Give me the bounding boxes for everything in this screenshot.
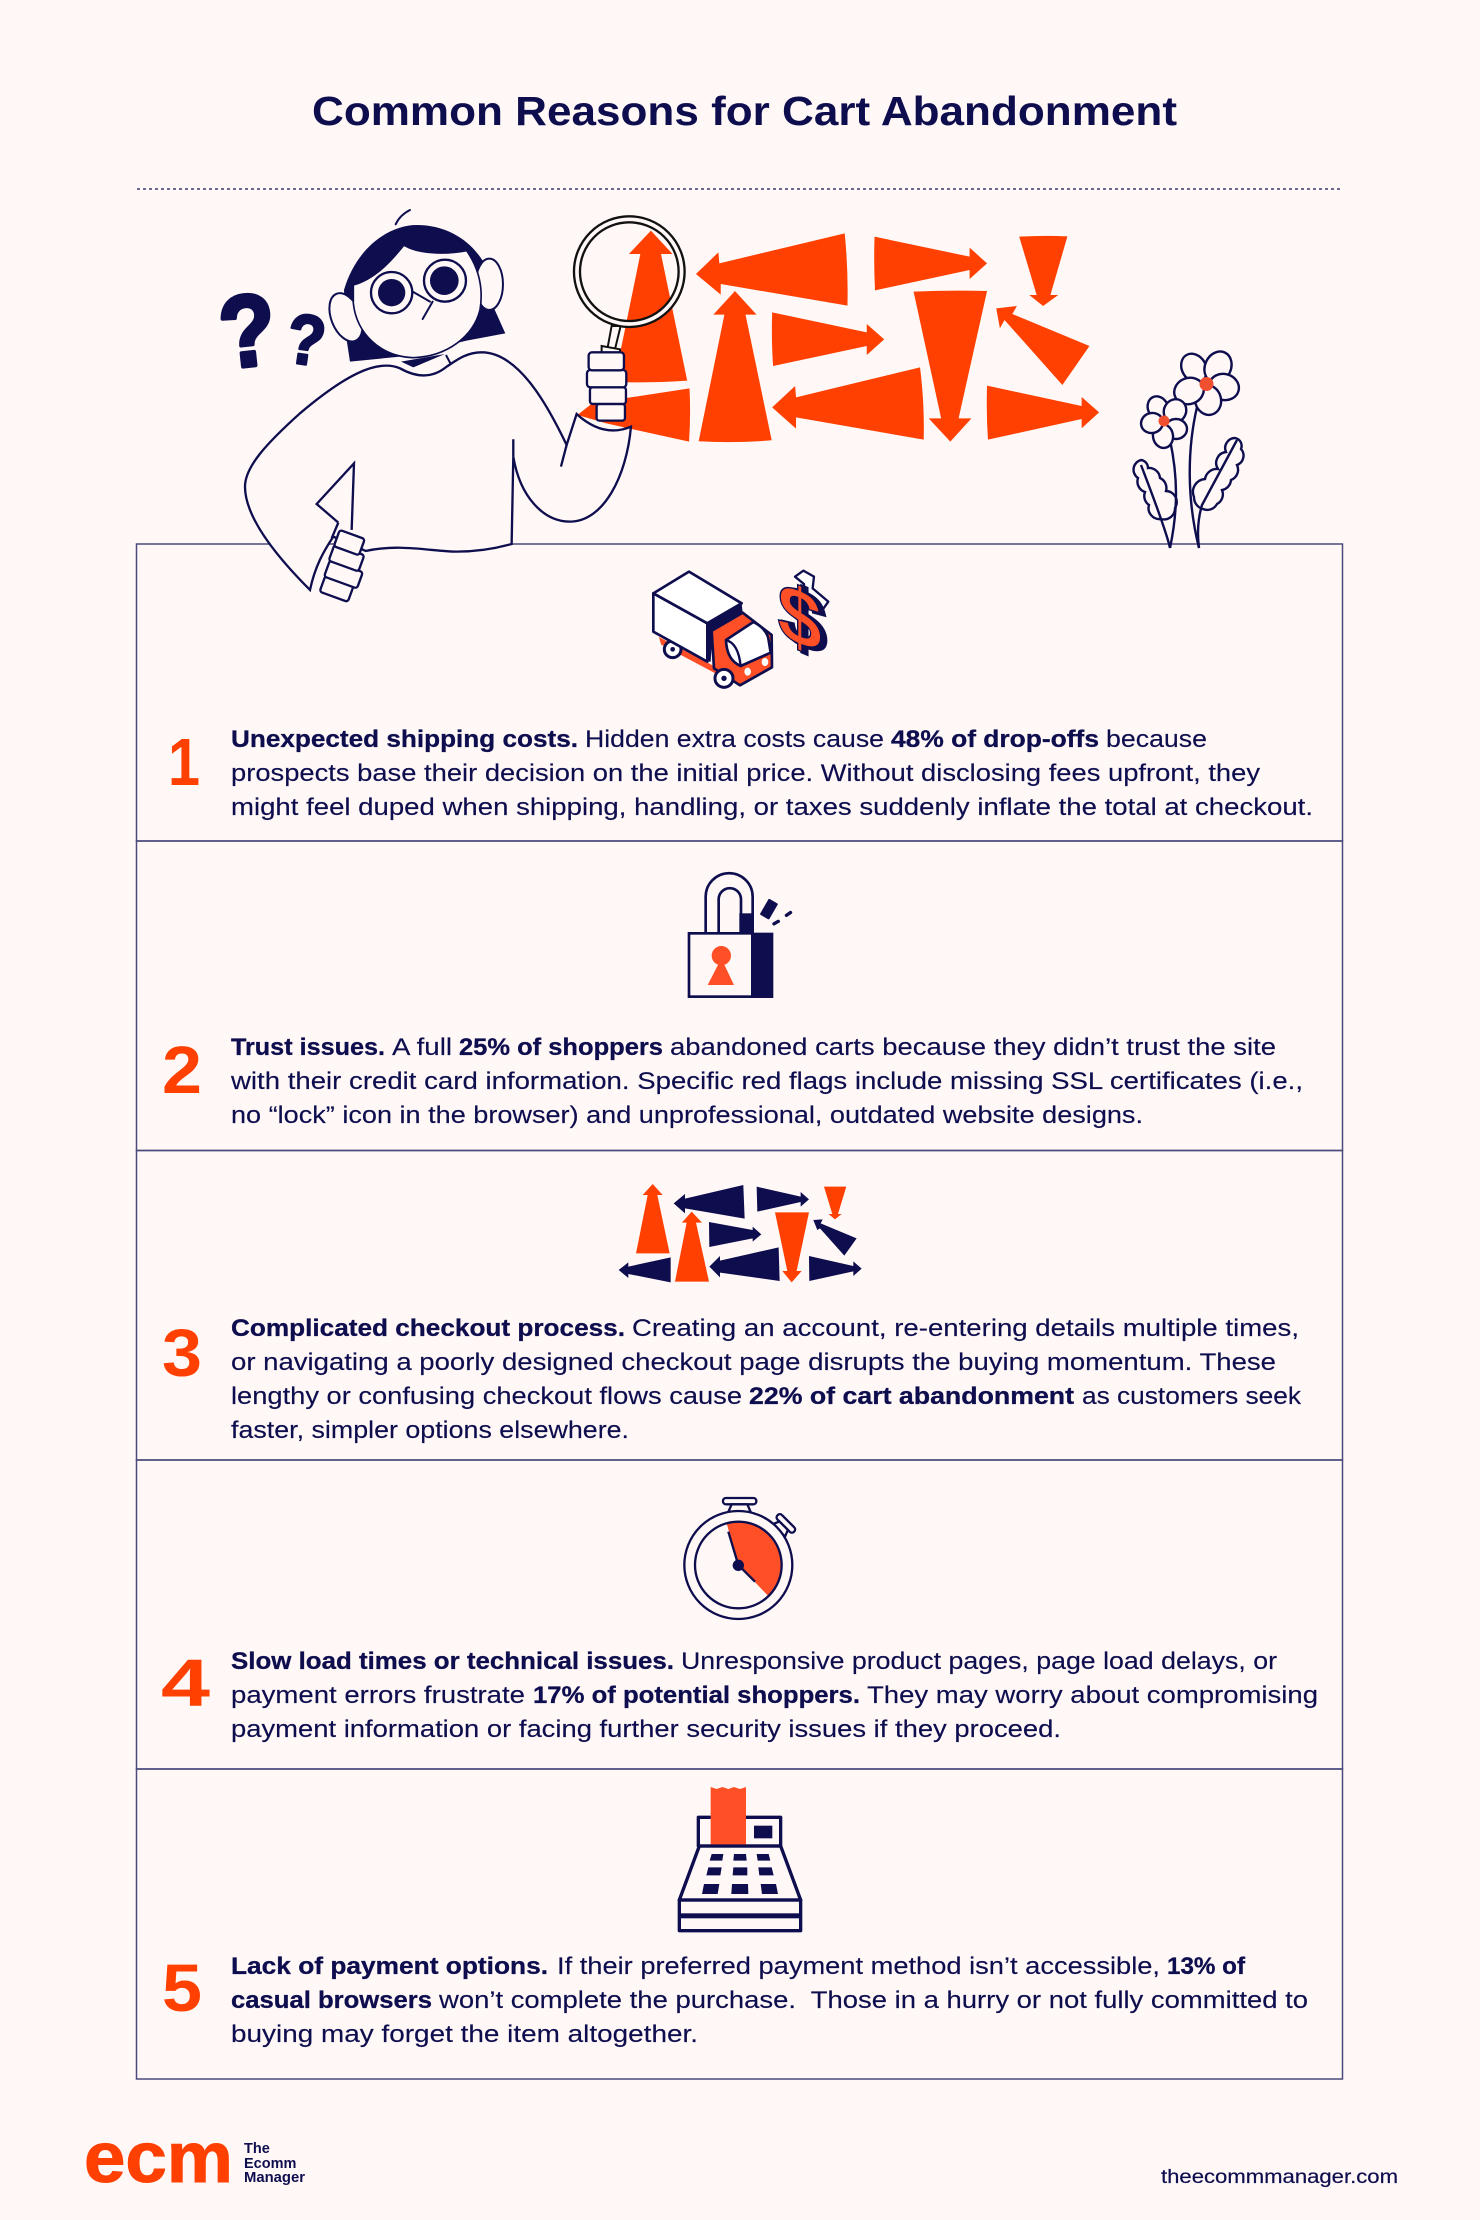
- text: reason 1: [231, 726, 1313, 821]
- question marks: ?: [282, 299, 330, 382]
- text: reason 2: A full: [392, 1034, 452, 1061]
- question marks: ?: [214, 272, 281, 391]
- text: reason 5: If their preferred payment method isn’t accessible,: [557, 1953, 1160, 1980]
- icon: truck and dollar sign: $: [777, 562, 822, 671]
- right hand: [587, 352, 626, 421]
- left hand: [320, 530, 365, 602]
- text: reason 3: faster, simpler options elsewhere.: [231, 1417, 629, 1444]
- text: reason 3: [231, 1315, 1302, 1444]
- text: reason 1: 48% of drop-offs: [891, 726, 1099, 753]
- face: [353, 245, 481, 358]
- hero: scattered orange arrows: [577, 231, 1099, 442]
- hero: person with magnifying glass: [214, 210, 685, 602]
- website url: theecommmanager.com: [1161, 2167, 1398, 2188]
- logo: Manager: [244, 2170, 305, 2186]
- logo: ecm: [84, 2119, 233, 2198]
- glasses: [371, 260, 466, 319]
- sweater: [245, 352, 631, 590]
- panel: reason 5: [136, 1769, 1342, 2079]
- text: reason 1: because: [1106, 726, 1207, 753]
- text: reason 2: abandoned carts because they didn’t trust the site: [670, 1034, 1276, 1061]
- text: reason 4: 17% of potential shoppers.: [533, 1682, 860, 1709]
- text: reason 3: as customers seek: [1082, 1383, 1302, 1410]
- text: reason 3: Complicated checkout process.: [231, 1315, 625, 1342]
- question marks: [214, 272, 330, 391]
- logo: [84, 2119, 305, 2198]
- text: reason 5: 13% of: [1167, 1953, 1246, 1980]
- text: reason 3: lengthy or confusing checkout flows cause: [231, 1383, 742, 1410]
- ears: [323, 259, 503, 346]
- hair: [344, 225, 505, 362]
- icon: padlock: [689, 873, 793, 998]
- number 1: 1: [168, 725, 200, 800]
- title: Common Reasons for Cart Abandonment: [312, 88, 1177, 134]
- text: reason 2: no “lock” icon in the browser) and unprofessional, outdated website designs.: [231, 1102, 1143, 1129]
- text: reason 1: might feel duped when shipping, handling, or taxes suddenly inflate the total at checkout.: [231, 794, 1313, 821]
- text: reason 3: 22% of cart abandonment: [749, 1383, 1074, 1410]
- icon: truck and dollar sign: [653, 562, 828, 687]
- panel: reason 4: [136, 1460, 1342, 1769]
- text: reason 2: Trust issues.: [231, 1034, 385, 1061]
- text: reason 2: [230, 1034, 1303, 1129]
- hero: flowers: [1134, 347, 1244, 548]
- panel: reason 3: [136, 1150, 1342, 1460]
- text: reason 1: Unexpected shipping costs.: [231, 726, 578, 753]
- text: reason 1: Hidden extra costs cause: [585, 726, 884, 753]
- logo: The: [244, 2141, 270, 2157]
- text: reason 4: Slow load times or technical issues.: [231, 1648, 674, 1675]
- text: reason 5: casual browsers: [231, 1987, 432, 2014]
- number 2: 2: [162, 1033, 202, 1108]
- number 5: 5: [162, 1951, 202, 2026]
- icon: scattered arrows: [619, 1184, 862, 1282]
- number 3: 3: [162, 1316, 202, 1391]
- text: reason 5: [231, 1953, 1308, 2048]
- icon: cash register: [679, 1787, 801, 1931]
- text: reason 4: Unresponsive product pages, page load delays, or: [681, 1648, 1277, 1675]
- text: reason 4: [231, 1648, 1318, 1743]
- magnifying glass: [574, 216, 685, 353]
- icon: truck and dollar sign: $: [782, 564, 826, 673]
- collar: [400, 354, 452, 372]
- text: reason 5: Lack of payment options.: [231, 1953, 548, 1980]
- text: reason 4: payment information or facing further security issues if they proceed.: [231, 1716, 1061, 1743]
- panel: reason 1: [136, 544, 1342, 841]
- text: reason 4: They may worry about compromising: [867, 1682, 1318, 1709]
- number 4: 4: [161, 1646, 210, 1721]
- text: reason 5: buying may forget the item altogether.: [231, 2021, 698, 2048]
- text: reason 3: or navigating a poorly designed checkout page disrupts the buying momentum. These: [231, 1349, 1276, 1376]
- text: reason 1: prospects base their decision on the initial price. Without disclosing fees upfront, they: [231, 760, 1261, 787]
- text: reason 2: 25% of shoppers: [459, 1034, 663, 1061]
- text: reason 4: payment errors frustrate: [231, 1682, 525, 1709]
- text: reason 5: won’t complete the purchase. Those in a hurry or not fully committed to: [438, 1987, 1308, 2014]
- panel: reason 2: [136, 841, 1342, 1150]
- icon: stopwatch: [684, 1498, 796, 1619]
- text: reason 2: with their credit card information. Specific red flags include missing SSL certificates (i.e.,: [230, 1068, 1303, 1095]
- text: reason 3: Creating an account, re-entering details multiple times,: [632, 1315, 1299, 1342]
- logo: Ecomm: [244, 2156, 296, 2172]
